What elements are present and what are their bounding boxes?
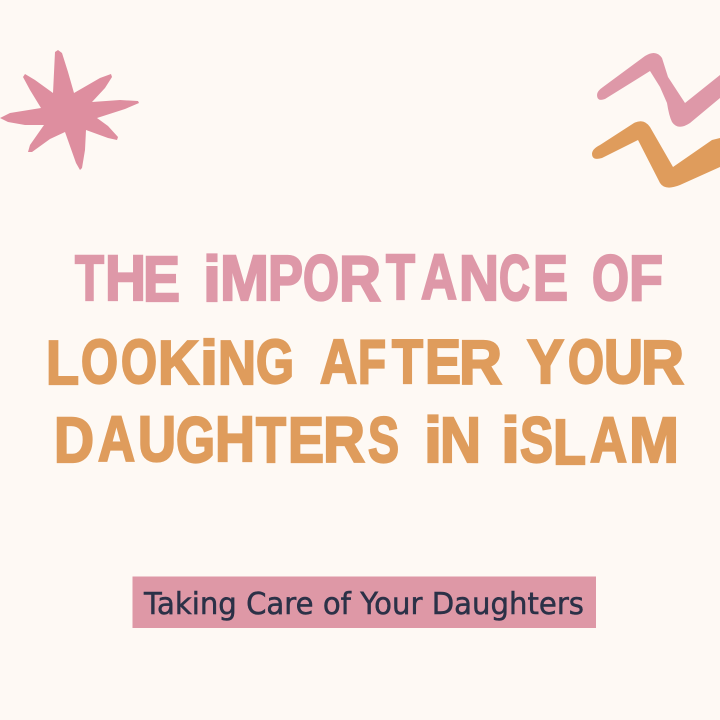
title line 1: E bbox=[533, 242, 568, 314]
icon: orange zigzag bbox=[592, 121, 720, 188]
title line 2: K bbox=[158, 329, 199, 398]
title line 3 bbox=[54, 403, 679, 478]
title line 1: H bbox=[105, 242, 146, 314]
title line 2: Y bbox=[527, 328, 564, 397]
title line 1: M bbox=[220, 242, 269, 314]
title line 1: i bbox=[203, 243, 221, 315]
title line 3: R bbox=[323, 404, 365, 476]
title line 1: T bbox=[75, 242, 104, 314]
title bbox=[46, 241, 684, 478]
title line 1: P bbox=[268, 242, 303, 314]
title line 1: A bbox=[421, 241, 457, 313]
title line 3: N bbox=[440, 404, 481, 476]
title line 3: T bbox=[256, 404, 286, 476]
title line 3: M bbox=[629, 404, 679, 476]
title line 2: O bbox=[81, 328, 118, 397]
title line 2: R bbox=[641, 329, 684, 398]
title line 2 bbox=[46, 328, 684, 398]
title line 1: R bbox=[339, 243, 381, 315]
subtitle banner bbox=[132, 576, 596, 628]
title line 3: U bbox=[138, 403, 176, 475]
title line 2: A bbox=[320, 328, 357, 397]
subtitle banner: Taking Care of Your Daughters bbox=[143, 587, 584, 622]
title line 2: i bbox=[200, 329, 218, 398]
title line 2: F bbox=[358, 328, 386, 397]
title line 3: L bbox=[553, 406, 586, 478]
title line 2: O bbox=[568, 328, 604, 397]
title line 2: L bbox=[46, 329, 79, 398]
title line 3: H bbox=[215, 403, 255, 475]
title line 3: S bbox=[368, 404, 399, 476]
title line 2: R bbox=[459, 329, 502, 398]
title line 3: D bbox=[54, 404, 94, 476]
title line 2: E bbox=[425, 328, 461, 397]
title line 1: O bbox=[592, 242, 629, 314]
title line 3: A bbox=[98, 403, 135, 475]
icon: pink star bbox=[0, 50, 139, 170]
title line 1 bbox=[75, 241, 663, 315]
title line 1: C bbox=[499, 242, 530, 314]
title line 2: N bbox=[218, 329, 256, 398]
title line 2: T bbox=[392, 328, 423, 397]
title line 1: N bbox=[459, 242, 499, 314]
title line 1: T bbox=[386, 241, 415, 313]
title line 3: E bbox=[288, 404, 324, 476]
title line 1: F bbox=[629, 242, 663, 314]
icon: pink zigzag bbox=[597, 53, 720, 127]
title line 1: O bbox=[303, 242, 339, 314]
title line 2: O bbox=[121, 328, 157, 397]
title line 3: G bbox=[176, 404, 215, 476]
title line 3: i bbox=[424, 404, 442, 476]
title line 3: i bbox=[501, 404, 520, 476]
title line 3: S bbox=[520, 404, 553, 476]
title line 1: E bbox=[143, 243, 180, 315]
title line 3: A bbox=[590, 404, 627, 476]
title line 2: U bbox=[604, 328, 643, 397]
title line 2: G bbox=[256, 328, 294, 397]
